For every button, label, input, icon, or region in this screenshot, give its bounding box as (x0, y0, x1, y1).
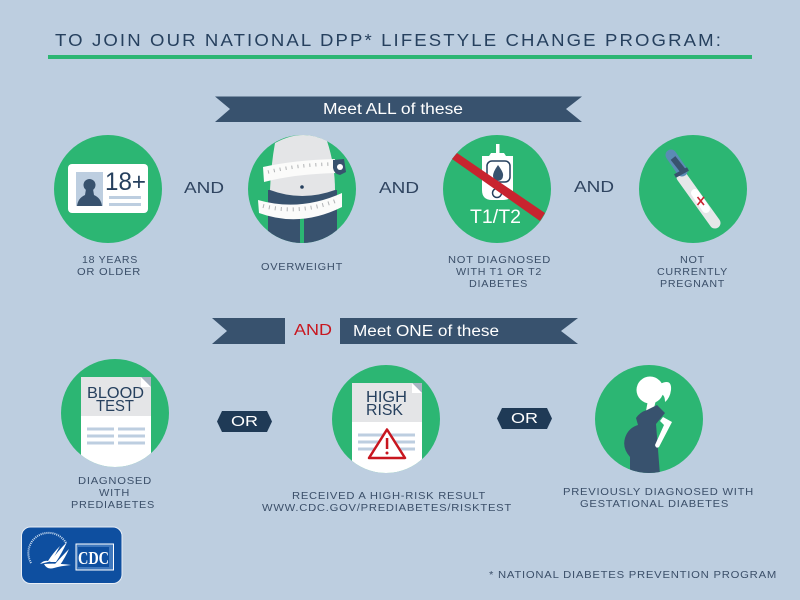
label: PREVIOUSLY DIAGNOSED WITH (563, 486, 754, 498)
ribbon: meet all (215, 96, 582, 122)
label: DIAGNOSED (78, 475, 152, 487)
icon: id card (68, 164, 148, 213)
connector: and 3: AND (574, 179, 614, 196)
connector: or 2: OR (511, 410, 538, 427)
footnote: * NATIONAL DIABETES PREVENTION PROGRAM (489, 569, 777, 581)
label: GESTATIONAL DIABETES (580, 498, 729, 510)
title (48, 30, 752, 59)
label: 18 YEARS (82, 254, 138, 266)
panel: high risk (262, 365, 512, 514)
label (448, 254, 551, 290)
ribbon: and meet one (212, 318, 578, 344)
icon: blood test document: TEST (96, 398, 134, 415)
panel: blood test (61, 359, 169, 511)
panel: not diagnosed (443, 135, 551, 290)
icon: glucose meter crossed out: T1/T2 (470, 207, 521, 228)
label: PREGNANT (660, 278, 725, 290)
label: DIABETES (469, 278, 528, 290)
panel: gestational diabetes (563, 365, 754, 510)
label (77, 254, 141, 278)
label: CURRENTLY (657, 266, 728, 278)
title: TO JOIN OUR NATIONAL DPP* LIFESTYLE CHANGE PROGRAM: (55, 30, 723, 50)
panel: 18 years or older (54, 135, 162, 278)
label (262, 490, 512, 514)
icon: hhs eagle (28, 533, 71, 568)
label: PREDIABETES (71, 499, 155, 511)
icon: waist with tape measure (258, 135, 346, 245)
label (657, 254, 728, 290)
connector: and 2: AND (379, 180, 419, 197)
icon: blood test document: BLOOD (87, 385, 144, 402)
connector: or 2 (497, 408, 552, 429)
ribbon: meet all: Meet ALL of these (323, 101, 463, 118)
label: OVERWEIGHT (261, 261, 343, 273)
connector: or 1: OR (231, 413, 258, 430)
label: WITH (99, 487, 130, 499)
label: NOT (680, 254, 705, 266)
icon: blood test document (81, 377, 151, 470)
panel: not currently pregnant (639, 135, 747, 290)
icon: cdc box: CDC (78, 548, 109, 568)
label: RECEIVED A HIGH-RISK RESULT (292, 490, 486, 502)
icon: pregnancy test (671, 155, 715, 223)
icon: id card: 18+ (105, 168, 146, 196)
panel: overweight (248, 135, 356, 273)
connector: or 1 (217, 411, 272, 432)
label: WWW.CDC.GOV/PREDIABETES/RISKTEST (262, 502, 512, 514)
icon: high risk document: RISK (366, 402, 403, 419)
logo: cdc (22, 527, 122, 584)
label: WITH T1 OR T2 (456, 266, 542, 278)
connector: and 1: AND (184, 180, 224, 197)
label: OR OLDER (77, 266, 141, 278)
label (71, 475, 155, 511)
icon: high risk document: HIGH (366, 389, 407, 406)
ribbon: and meet one: AND (294, 322, 332, 339)
label (563, 486, 754, 510)
icon: pregnant woman (624, 376, 672, 475)
label: NOT DIAGNOSED (448, 254, 551, 266)
ribbon: and meet one: Meet ONE of these (353, 323, 499, 340)
icon: glucose meter crossed out (452, 144, 545, 228)
icon: high risk document (352, 383, 422, 476)
